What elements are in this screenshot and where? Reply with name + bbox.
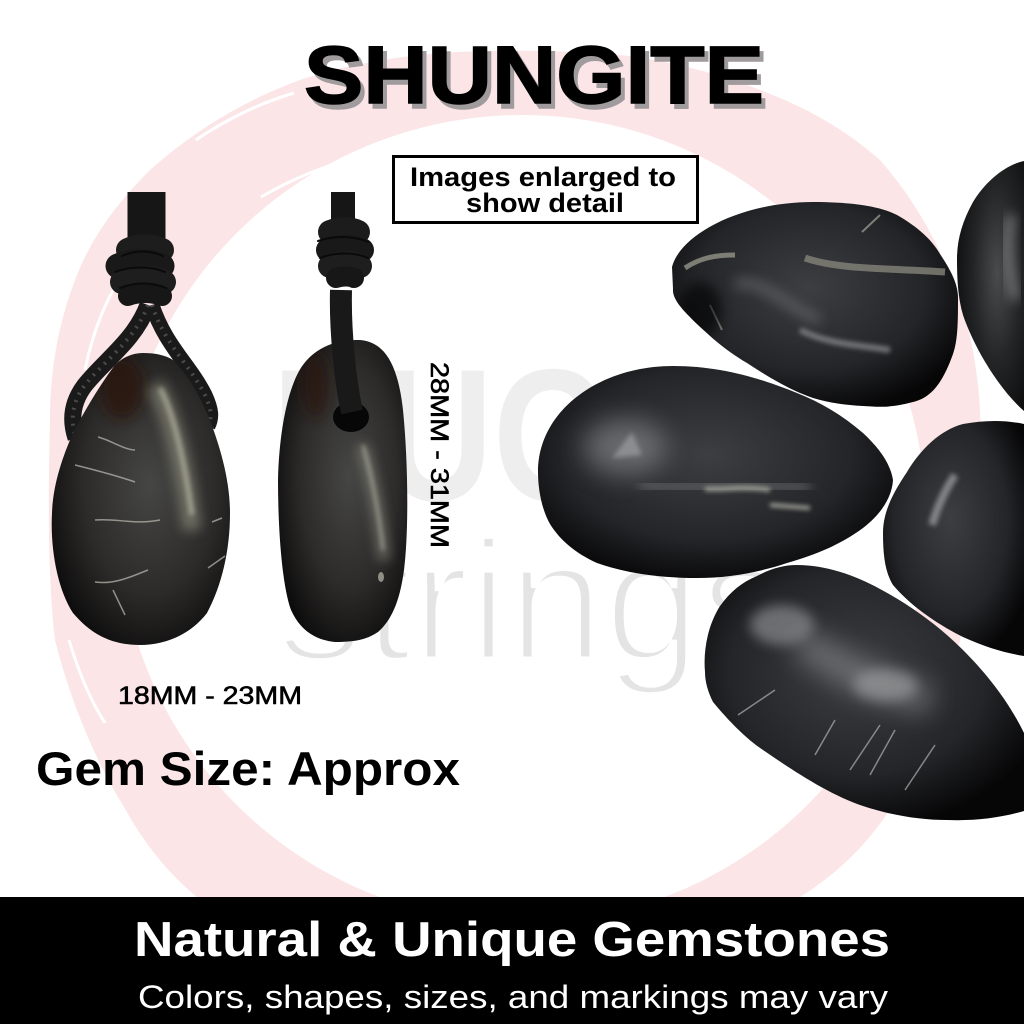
- stone: [52, 353, 230, 645]
- pendant front view: [52, 192, 230, 645]
- title: SHUNGITE: [304, 30, 764, 121]
- bottom banner: Colors, shapes, sizes, and markings may vary: [138, 979, 888, 1015]
- pink brush ring: [49, 51, 981, 923]
- gem size label: Gem Size: Approx: [36, 742, 460, 795]
- note box: show detail: [466, 188, 624, 218]
- watermark logo: [272, 330, 787, 697]
- gemstone pile: [538, 161, 1024, 820]
- height dimension: 28MM - 31MM: [425, 362, 453, 548]
- note box: [394, 156, 698, 222]
- cord top: [331, 192, 355, 240]
- stone top right: [957, 161, 1024, 411]
- stone centre: [538, 366, 893, 578]
- stone bottom: [705, 565, 1024, 820]
- watermark logo: HUG: [272, 330, 612, 540]
- pendant side view: [278, 192, 407, 642]
- bottom banner: [0, 897, 1024, 1024]
- stone highlights and markings: [75, 356, 225, 615]
- stone highlights: [301, 351, 384, 582]
- watermark logo: strings: [277, 505, 787, 697]
- cord through hole: [341, 290, 352, 412]
- drill hole: [333, 402, 369, 432]
- width dimension: 18MM - 23MM: [118, 682, 302, 710]
- stone right: [883, 421, 1024, 656]
- bottom banner: Natural & Unique Gemstones: [134, 913, 890, 967]
- title: SHUNGITE: [308, 35, 768, 126]
- knot: [115, 246, 166, 296]
- note box: Images enlarged to: [410, 162, 676, 192]
- stone top: [672, 202, 958, 407]
- knot: [318, 229, 368, 278]
- stone: [278, 340, 407, 642]
- cord: [73, 192, 211, 438]
